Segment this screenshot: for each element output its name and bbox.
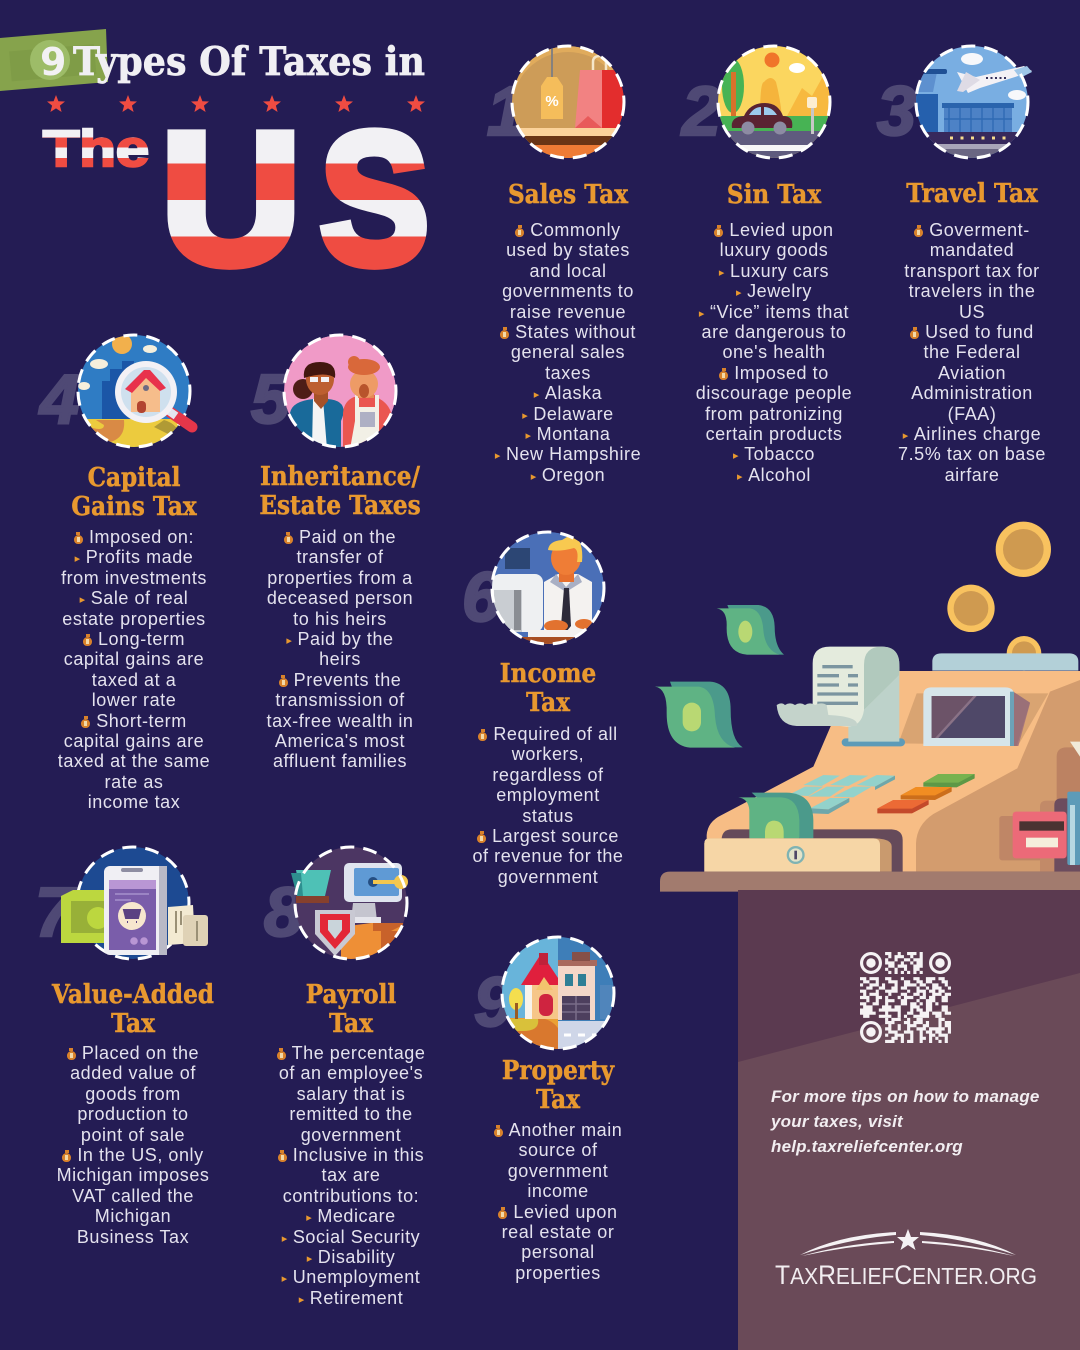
text block: capital gains are [64, 649, 204, 669]
flying bill: large [655, 682, 743, 748]
heading [306, 980, 396, 1039]
text block: real estate or [502, 1222, 614, 1242]
panel: payroll tax [264, 846, 425, 1308]
text block: production to [77, 1104, 189, 1124]
heading [259, 462, 421, 521]
text block: lower rate [92, 690, 176, 710]
text block: discourage people [696, 383, 852, 403]
text block: transport tax for [904, 261, 1040, 281]
text block: income [527, 1181, 589, 1201]
text block: personal [521, 1242, 595, 1262]
bill [61, 890, 109, 943]
icon: airport and plane [876, 44, 1032, 160]
counter top [660, 872, 1080, 892]
heading: Tax [329, 1009, 373, 1039]
icon: shopping tag and bag: % [545, 93, 559, 110]
text block: The percentage [292, 1043, 425, 1063]
icon: computer, folder and shield [264, 846, 408, 960]
icon: dollar bill [0, 29, 108, 91]
icon: computer, folder and shield: 8 [264, 873, 303, 951]
call to action text: For more tips on how to manage [771, 1087, 1040, 1106]
text block: properties from a [267, 568, 413, 588]
text block: Goverment- [929, 220, 1030, 240]
text block: ▸ Luxury cars [719, 261, 829, 281]
phone [104, 866, 167, 955]
text block: Aviation [938, 363, 1006, 383]
text block: properties [515, 1263, 601, 1283]
icon: car on road: 2 [680, 72, 721, 150]
text block: are dangerous to [702, 322, 846, 342]
text block: airfare [945, 465, 999, 485]
text block: and local [529, 261, 606, 281]
text block: ▸ Disability [307, 1247, 395, 1267]
text block: income tax [88, 792, 180, 812]
text block: Imposed on: [89, 527, 194, 547]
box [341, 903, 404, 959]
text block: ▸ Montana [526, 424, 610, 444]
heading: Sales Tax [508, 180, 628, 210]
text block: Michigan imposes [57, 1165, 209, 1185]
heading: Income [500, 659, 596, 689]
text block: transfer of [296, 547, 384, 567]
text block: ▸ Jewelry [736, 281, 812, 301]
text block: of revenue for the [472, 846, 624, 866]
text block: ▸ Unemployment [282, 1267, 420, 1287]
heading: Tax [526, 688, 570, 718]
text block: source of [518, 1140, 598, 1160]
heading: Property [502, 1056, 614, 1086]
text block: government [508, 1161, 608, 1181]
text block [494, 1120, 622, 1283]
text block: the Federal [923, 342, 1021, 362]
text block: estate properties [62, 609, 206, 629]
text block: ▸ “Vice” items that [699, 302, 849, 322]
text block: ▸ Sale of real [80, 588, 188, 608]
text block: tax are [322, 1165, 380, 1185]
heading [502, 1056, 615, 1115]
receipts [168, 905, 208, 946]
text block [472, 724, 624, 887]
heading: Tax [536, 1085, 580, 1115]
text block: deceased person [267, 588, 413, 608]
text block [266, 527, 413, 771]
text block: regardless of [492, 765, 604, 785]
text block: ▸ Delaware [522, 404, 614, 424]
text block: ▸ Tobacco [733, 444, 815, 464]
icon: houses [474, 936, 616, 1050]
text block [57, 1043, 209, 1247]
text block: Placed on the [82, 1043, 199, 1063]
text block: Michigan [95, 1206, 171, 1226]
text block: from patronizing [705, 404, 843, 424]
text block: affluent families [273, 751, 407, 771]
icon: phone with shopping cart: 7 [35, 873, 77, 951]
text block: ▸ Alcohol [737, 465, 811, 485]
text block: Imposed to [734, 363, 829, 383]
text block: ▸ Medicare [306, 1206, 396, 1226]
folder [291, 870, 331, 903]
display screen [923, 687, 1014, 746]
text block: used by states [506, 240, 630, 260]
title line: Types Of Taxes in [73, 39, 425, 85]
text block: Levied upon [729, 220, 834, 240]
text block: US [959, 302, 985, 322]
icon: couple portrait [250, 334, 398, 448]
text block: Prevents the [294, 670, 401, 690]
text block: taxes [545, 363, 591, 383]
shield [315, 910, 355, 956]
text block: government [498, 867, 598, 887]
text block [494, 220, 641, 485]
icon: magnifier over house: 4 [38, 360, 79, 438]
panel: income tax [462, 530, 624, 887]
text block: employment [496, 785, 600, 805]
text block: taxed at the same [58, 751, 210, 771]
title line: 9 [40, 40, 66, 84]
heading: Gains Tax [71, 492, 197, 522]
icon: magnifier over house [38, 334, 198, 448]
text block: taxed at a [92, 670, 176, 690]
call to action text: your taxes, visit [771, 1112, 903, 1131]
text block: Used to fund [925, 322, 1034, 342]
lighter diagonal background [738, 973, 1080, 1350]
text block: Levied upon [513, 1202, 618, 1222]
text block: In the US, only [77, 1145, 204, 1165]
coins [947, 522, 1051, 671]
text block: heirs [319, 649, 361, 669]
icon: airport and plane: 3 [877, 72, 916, 150]
icon: houses: 9 [474, 963, 513, 1041]
heading: Payroll [306, 980, 396, 1010]
panel: sales tax [486, 44, 641, 485]
panel: sin tax [680, 44, 852, 485]
text block: goods from [85, 1084, 181, 1104]
heading [52, 980, 214, 1039]
text block: status [522, 806, 574, 826]
text block: Paid on the [299, 527, 396, 547]
text block: one's health [722, 342, 826, 362]
icon: shopping tag and bag: 1 [487, 72, 526, 150]
text block [277, 1043, 425, 1308]
text block: to his heirs [293, 609, 387, 629]
text block: VAT called the [72, 1186, 194, 1206]
heading word: US [161, 94, 429, 303]
heading: Estate Taxes [259, 491, 421, 521]
text block: Required of all [493, 724, 618, 744]
text block: ▸ Paid by the [286, 629, 394, 649]
illustration: cash register [655, 522, 1080, 892]
panel: property tax [474, 936, 622, 1283]
text block: ▸ New Hampshire [495, 444, 641, 464]
text block: of an employee's [279, 1063, 423, 1083]
heading: Travel Tax [906, 179, 1038, 209]
panel: value-added tax [35, 846, 214, 1247]
text block: rate as [105, 772, 163, 792]
text block: contributions to: [283, 1186, 419, 1206]
text block: Administration [911, 383, 1033, 403]
text block: general sales [511, 342, 625, 362]
call to action text: help.taxreliefcenter.org [771, 1137, 963, 1156]
text block: ▸ Alaska [534, 383, 602, 403]
text block: Short-term [96, 711, 187, 731]
icon: car on road [680, 44, 832, 160]
magnifier [115, 361, 192, 427]
text block: transmission of [275, 690, 405, 710]
icon: office worker [462, 530, 606, 646]
text block: America's most [275, 731, 405, 751]
heading: Value-Added [52, 980, 214, 1010]
text block: States without [515, 322, 636, 342]
text block: ▸ Retirement [299, 1288, 403, 1308]
text block: ▸ Airlines charge [903, 424, 1041, 444]
flying bill: small [717, 605, 784, 655]
heading [71, 463, 198, 522]
text block: travelers in the [909, 281, 1035, 301]
function buttons [877, 774, 975, 813]
text block: added value of [70, 1063, 196, 1083]
QR code [860, 952, 951, 1043]
icon: office worker: 6 [462, 558, 502, 636]
text block: raise revenue [510, 302, 626, 322]
text block [898, 220, 1046, 485]
text block: remitted to the [289, 1104, 413, 1124]
icon: shopping tag and bag [486, 44, 626, 160]
text block: 7.5% tax on base [898, 444, 1046, 464]
plane [957, 66, 1032, 93]
text block: ▸ Profits made [75, 547, 193, 567]
panel: inheritance and estate taxes [250, 334, 421, 771]
icon: couple portrait: 5 [251, 360, 291, 438]
text block: from investments [61, 568, 207, 588]
text block: Commonly [530, 220, 621, 240]
text block: capital gains are [64, 731, 204, 751]
text block [58, 527, 210, 812]
keypad [788, 775, 895, 814]
panel: capital gains tax [38, 334, 210, 812]
text block: Long-term [98, 629, 185, 649]
heading: Inheritance/ [260, 462, 420, 492]
text block: governments to [502, 281, 634, 301]
register body [707, 671, 1080, 872]
text block: Largest source [492, 826, 619, 846]
text block: government [301, 1125, 401, 1145]
wallet and card [999, 742, 1080, 872]
panel: call to action [738, 890, 1080, 1350]
heading word: The: The [43, 120, 149, 177]
receipt roll [777, 647, 905, 746]
stars row [47, 95, 425, 112]
text block: point of sale [81, 1125, 185, 1145]
monitor [344, 863, 408, 902]
text block: luxury goods [720, 240, 828, 260]
text block: (FAA) [948, 404, 996, 424]
header block [0, 29, 429, 280]
text block: ▸ Social Security [282, 1227, 420, 1247]
register lid [932, 653, 1078, 671]
call to action text [770, 1087, 1040, 1156]
text block [696, 220, 852, 485]
heading [500, 659, 596, 718]
panel: travel tax [876, 44, 1046, 485]
logo swoosh and star [800, 1229, 1016, 1256]
text block: salary that is [297, 1084, 405, 1104]
counter base [738, 892, 1080, 900]
text block: workers, [512, 744, 584, 764]
cash drawer [704, 793, 903, 872]
text block: Another main [509, 1120, 622, 1140]
text block: certain products [706, 424, 842, 444]
text block: Inclusive in this [293, 1145, 424, 1165]
text block: Business Tax [77, 1227, 189, 1247]
heading: Tax [111, 1009, 155, 1039]
text block: ▸ Oregon [531, 465, 605, 485]
text block: mandated [930, 240, 1014, 260]
heading: Capital [88, 463, 180, 493]
heading: Sin Tax [727, 180, 821, 210]
icon: phone with shopping cart [35, 846, 208, 960]
text block: tax-free wealth in [267, 711, 413, 731]
